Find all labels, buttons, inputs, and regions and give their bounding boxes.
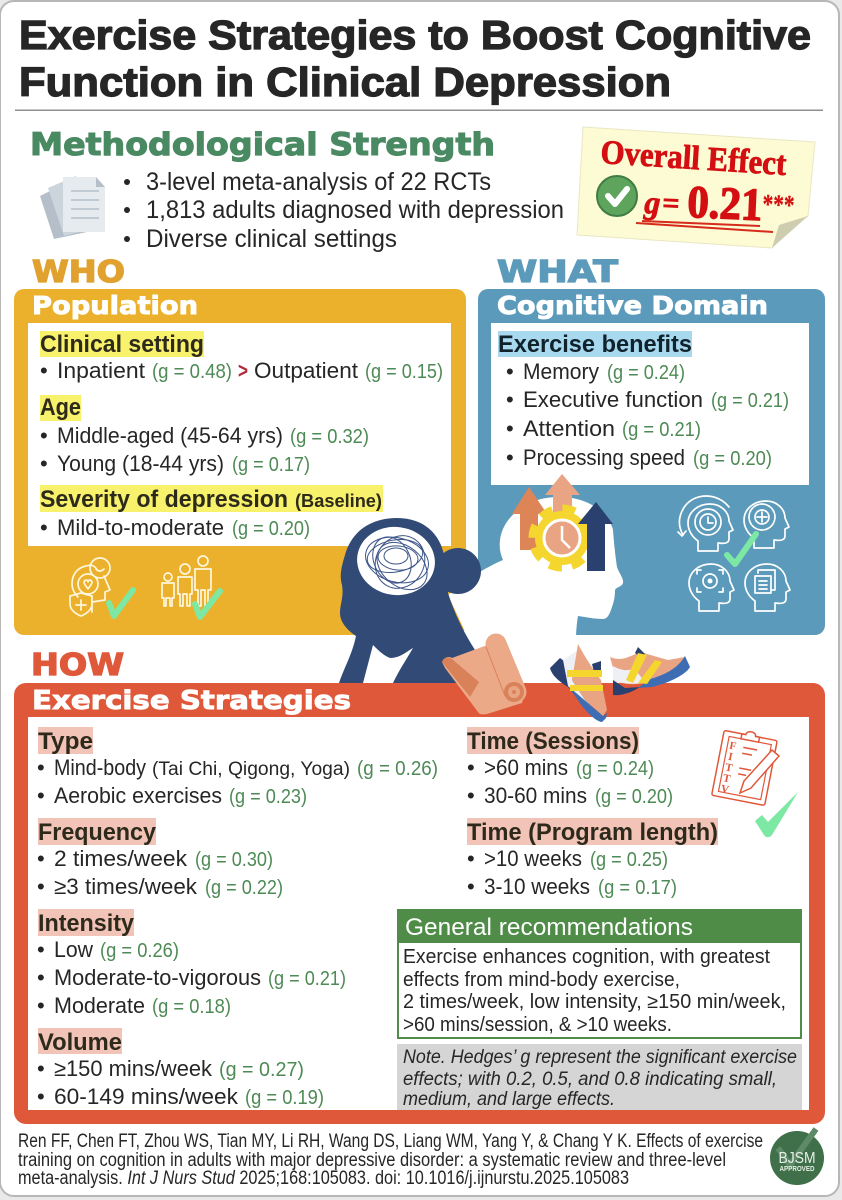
clinical setting: (g = 0.48) [152,360,232,383]
severity of depression: (g = 0.20) [232,517,310,540]
volume: (g = 0.19) [245,1086,324,1109]
panel: general recommendations: 2 times/week, low intensity, ≥150 min/week, [403,991,786,1013]
exercise benefits: Attention [523,416,615,441]
panel: general recommendations: General recommendations [405,914,693,941]
type [37,727,438,808]
clinical setting: Clinical setting [40,331,204,358]
methodological strength bullets: 3-level meta-analysis of 22 RCTs [146,168,491,196]
time program length: (g = 0.17) [598,876,677,899]
type: (g = 0.23) [229,785,307,808]
note: effects; with 0.2, 0.5, and 0.8 indicating small, [403,1069,777,1090]
exercise benefits: • [506,416,514,441]
exercise benefits: • [506,359,514,384]
icon: FITT clipboard: T [722,772,732,785]
icon: check circle [597,176,637,216]
type: (g = 0.26) [357,757,438,780]
frequency: (g = 0.30) [195,848,273,871]
intensity: Moderate [54,993,145,1018]
arrow: navy [578,502,613,571]
volume: (g = 0.27) [219,1058,304,1081]
time sessions: Time (Sessions) [467,728,639,755]
heading: cognitive domain: Cognitive Domain [497,291,768,320]
exercise benefits: Exercise benefits [498,331,692,358]
panel: general recommendations: >60 mins/session, & >10 weeks. [403,1014,672,1036]
frequency [37,818,283,899]
clinical setting: (g = 0.15) [365,360,443,383]
intensity [37,909,346,1018]
time program length: (g = 0.25) [590,848,668,871]
panel: exercise strategies [14,683,825,1124]
arrow: orange [512,487,547,550]
volume: ≥150 mins/week [54,1056,213,1081]
callout: overall effect sticky note: *** [762,189,795,222]
callout: overall effect sticky note [577,127,815,248]
illustration: yoga mat [442,644,525,714]
methodological strength bullets: Diverse clinical settings [146,225,397,253]
icon: FITT clipboard: I [727,751,734,763]
callout: overall effect sticky note: g [643,184,661,221]
citation: meta-analysis. Int J Nurs Stud 2025;168:105083. doi: 10.1016/j.ijnurstu.2025.105083 [18,1168,629,1189]
methodological strength bullets: 1,813 adults diagnosed with depression [146,196,564,224]
badge: BJSM approved [770,1129,824,1185]
callout: overall effect sticky note: = [662,187,680,221]
age [40,394,369,476]
intensity: (g = 0.18) [152,995,231,1018]
type: (Tai Chi, Qigong, Yoga) [152,759,350,780]
time sessions: • [467,755,475,780]
intensity: Moderate-to-vigorous [54,965,261,990]
note [397,1044,802,1110]
exercise benefits: • [506,387,514,412]
icon: emotional health head [70,558,110,616]
severity of depression: Severity of depression [40,486,288,513]
volume: 60-149 mins/week [54,1084,239,1109]
icon: documents [40,176,105,239]
intensity: • [37,965,45,990]
type: Mind-body [54,755,146,780]
heading: population: Population [32,291,198,320]
frequency: • [37,874,45,899]
icon: FITT clipboard [712,727,779,805]
icon: gear with clock [533,509,591,567]
panel: population [14,289,466,635]
exercise benefits: (g = 0.20) [693,447,772,470]
volume: • [37,1056,45,1081]
panel: general recommendations [397,909,802,1038]
time program length: >10 weeks [484,846,582,871]
frequency: 2 times/week [54,846,188,871]
age: Young (18-44 yrs) [57,451,224,476]
exercise benefits: (g = 0.21) [711,389,789,412]
time sessions: (g = 0.24) [576,757,654,780]
citation: training on cognition in adults with major depressive disorder: a systematic review and three-level [18,1150,726,1171]
time program length: 3-10 weeks [484,874,590,899]
heading: Methodological Strength: Methodological Strength [30,127,495,163]
left shoe [550,644,607,722]
label: WHAT: WHAT [497,255,619,290]
panel: general recommendations: effects from mind-body exercise, [403,969,680,991]
type: Aerobic exercises [54,783,222,808]
age: Age [40,394,81,421]
exercise benefits [498,331,789,470]
volume [37,1028,324,1109]
frequency: ≥3 times/week [54,874,198,899]
clinical setting: Outpatient [254,358,358,383]
time program length: • [467,874,475,899]
time sessions [467,727,673,808]
time sessions: (g = 0.20) [595,785,673,808]
exercise benefits: Processing speed [523,445,685,470]
note: medium, and large effects. [403,1089,615,1110]
severity of depression: • [40,515,48,540]
time sessions: 30-60 mins [484,783,587,808]
exercise benefits: (g = 0.21) [622,418,701,441]
age: • [40,423,48,448]
heading: exercise strategies: Exercise Strategies [32,686,351,716]
intensity: Low [54,937,93,962]
intensity: Intensity [38,910,135,937]
volume: • [37,1084,45,1109]
time program length: Time (Program length) [467,819,718,846]
type: Type [38,728,93,755]
intensity: (g = 0.26) [100,939,179,962]
age: • [40,451,48,476]
type: • [37,783,45,808]
clinical setting: > [238,358,248,383]
exercise benefits: Memory [523,359,599,384]
age: Middle-aged (45-64 yrs) [57,423,283,448]
panel: general recommendations: Exercise enhances cognition, with greatest [403,946,770,968]
severity of depression: Mild-to-moderate [57,515,224,540]
clinical setting: Inpatient [57,358,145,383]
icon: cognitive heads [678,496,790,611]
arrow: peach [545,474,580,515]
icon: check marks [109,590,220,617]
title [19,12,811,105]
icon: check mark [727,534,756,564]
volume: Volume [38,1029,122,1056]
right shoe [610,647,690,695]
intensity: (g = 0.21) [268,967,346,990]
time program length [467,818,718,899]
frequency: • [37,846,45,871]
icon: FITT clipboard: T [724,761,734,775]
badge: BJSM approved: BJSM [778,1150,816,1167]
illustration: dark head with tangled thoughts [339,518,481,683]
icon: FITT clipboard: V [720,783,730,796]
badge: BJSM approved: APPROVED [780,1166,814,1173]
age: (g = 0.17) [232,453,310,476]
severity of depression: (Baseline) [295,491,382,511]
title: Function in Clinical Depression [19,59,671,105]
panel: cognitive domain [478,289,825,635]
illustration: white head with gear and arrows [448,474,623,690]
frequency: Frequency [38,819,157,846]
time sessions: >60 mins [484,755,568,780]
title: Exercise Strategies to Boost Cognitive [19,12,811,58]
intensity: • [37,993,45,1018]
label: WHO: WHO [32,255,125,290]
time program length: • [467,846,475,871]
icon: age groups [162,556,211,606]
label: HOW: HOW [31,648,124,683]
severity of depression [40,485,383,540]
exercise benefits: Executive function [523,387,703,412]
callout: overall effect sticky note: Overall Effect [599,134,788,183]
tangled scribble [360,527,436,599]
callout: overall effect sticky note: 0.21 [686,176,764,230]
type: • [37,755,45,780]
frequency: (g = 0.22) [205,876,283,899]
exercise benefits: • [506,445,514,470]
time sessions: • [467,783,475,808]
icon: FITT clipboard: F [728,740,737,753]
age: (g = 0.32) [290,425,369,448]
exercise benefits: (g = 0.24) [607,361,685,384]
methodological strength bullets [124,168,564,253]
clinical setting [40,331,443,383]
citation [18,1131,763,1189]
note: Note. Hedges’ g represent the significant exercise [403,1047,797,1068]
clinical setting: • [40,358,48,383]
intensity: • [37,937,45,962]
illustration: running shoes [550,644,690,722]
icon: check mark [755,792,798,837]
